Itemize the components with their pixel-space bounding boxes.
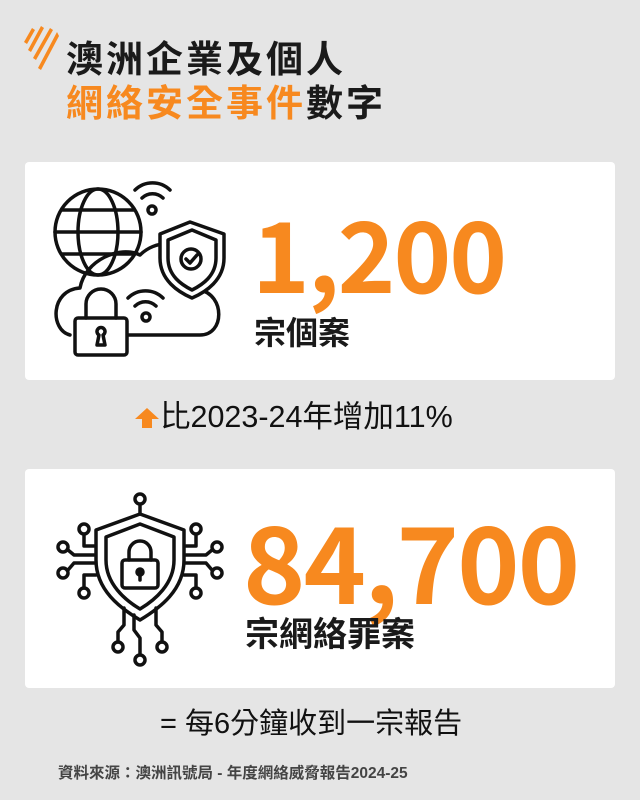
panel: cybercrime xyxy=(25,469,615,688)
title xyxy=(66,39,386,124)
source: 資料來源：澳洲訊號局 - 年度網絡威脅報告2024-25 xyxy=(58,765,408,782)
title: 網絡安全事件數字 xyxy=(66,83,386,124)
increase note: 比2023-24年增加11% xyxy=(160,400,453,434)
icon: cloud security xyxy=(53,181,226,357)
number: 84,700: 84,700 xyxy=(243,481,578,635)
icon: shield circuit xyxy=(56,492,224,667)
panel: cases xyxy=(25,162,615,380)
title: 澳洲企業及個人 xyxy=(66,39,346,80)
label: 宗個案: 宗個案 xyxy=(254,315,350,351)
logo xyxy=(24,26,59,70)
label: 宗網絡罪案: 宗網絡罪案 xyxy=(245,616,415,654)
icon: up arrow xyxy=(135,408,159,428)
number: 1,200: 1,200 xyxy=(252,180,505,322)
note: every 6 minutes: = 每6分鐘收到一宗報告 xyxy=(160,708,462,740)
